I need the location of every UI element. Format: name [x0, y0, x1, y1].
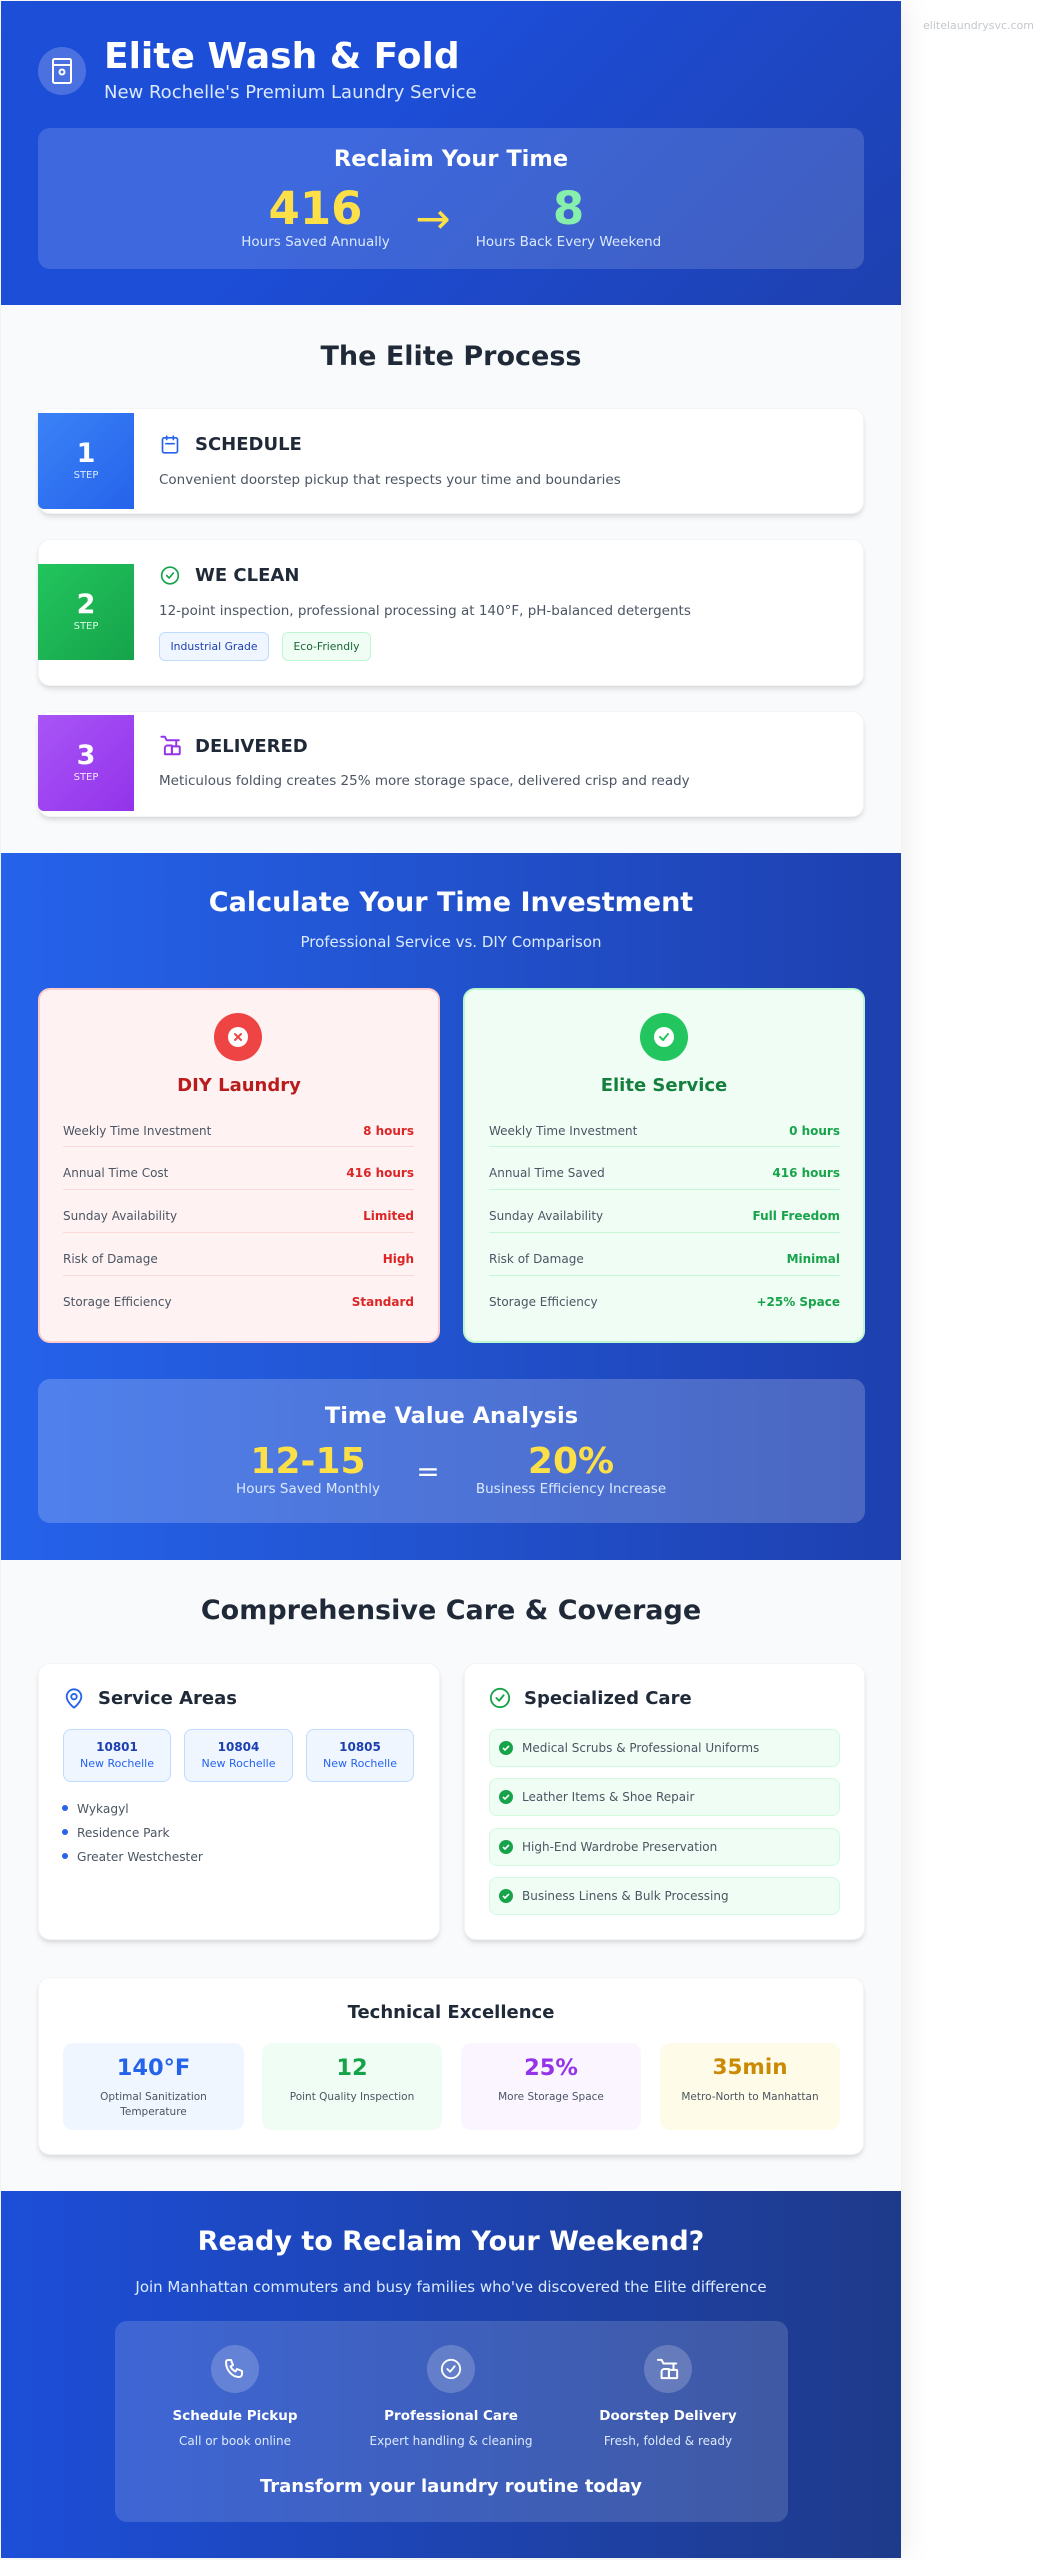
subtitle: New Rochelle's Premium Laundry Service [104, 82, 477, 103]
step 1 description: Convenient doorstep pickup that respects your time and boundaries [159, 472, 621, 488]
action: professional care: Professional Care [384, 2408, 518, 2424]
neighborhoods list: Wykagyl [77, 1802, 129, 1816]
panel: reclaim your time [38, 128, 864, 269]
specialized care title: Specialized Care [524, 1688, 692, 1709]
tile: 35min [660, 2043, 840, 2130]
heading: care: Comprehensive Care & Coverage [201, 1595, 701, 1626]
icon: washing machine [38, 47, 86, 95]
care item 4 [489, 1877, 840, 1915]
panel: header [1, 1, 901, 305]
step 3 description: Meticulous folding creates 25% more storage space, delivered crisp and ready [159, 773, 690, 789]
care item 2 [489, 1778, 840, 1816]
tile: 35min: 35min [712, 2055, 788, 2080]
step 2 number: 2 [77, 589, 95, 620]
DIY rows: 8 hours [363, 1124, 414, 1138]
action: doorstep delivery: Doorstep Delivery [599, 2408, 737, 2424]
icon: map pin [66, 1688, 82, 1709]
tile: 12: 12 [336, 2055, 368, 2081]
step 1 number: 1 [77, 438, 95, 469]
elite rows: 0 hours [789, 1124, 840, 1138]
zip 10801: New Rochelle [80, 1757, 154, 1770]
action: doorstep delivery [599, 2408, 737, 2448]
DIY title: DIY Laundry [177, 1075, 301, 1096]
icon: calendar [162, 435, 178, 454]
stat: 416 hours: 416 [269, 182, 362, 235]
tile: 140F: Optimal Sanitization [100, 2091, 207, 2103]
icon: check circle [427, 2345, 475, 2393]
step 3 card [38, 711, 864, 817]
step 1 card [38, 408, 864, 514]
DIY rows: Storage Efficiency [63, 1295, 172, 1309]
stat: 8 hours [476, 182, 661, 250]
DIY rows: High [383, 1252, 414, 1266]
step 3 title: DELIVERED [195, 736, 308, 757]
elite rows [489, 1124, 840, 1309]
elite rows: Sunday Availability [489, 1209, 603, 1223]
elite rows: Full Freedom [752, 1209, 840, 1223]
panel: specialized care [464, 1663, 865, 1940]
elite title: Elite Service [601, 1075, 727, 1096]
zip 10804 [184, 1729, 293, 1782]
tag: eco-friendly [282, 632, 371, 661]
stat: 8 hours: Hours Back Every Weekend [476, 234, 661, 250]
elite rows: +25% Space [756, 1295, 840, 1309]
stat: 20%: Business Efficiency Increase [476, 1481, 666, 1497]
panel: technical excellence [38, 1977, 864, 2155]
CTA subheading: Join Manhattan commuters and busy families who've discovered the Elite difference [135, 2278, 767, 2296]
zip 10801: 10801 [96, 1740, 138, 1754]
step 1 number: STEP [74, 470, 98, 481]
action: schedule pickup: Schedule Pickup [172, 2408, 298, 2424]
tile: 140F: Temperature [120, 2106, 187, 2118]
step 2 number: STEP [74, 621, 98, 632]
elite rows: Annual Time Saved [489, 1166, 605, 1180]
zip 10801 [63, 1729, 171, 1782]
service areas title: Service Areas [98, 1688, 237, 1709]
DIY rows: Risk of Damage [63, 1252, 158, 1266]
tile: 25%: 25% [524, 2055, 578, 2081]
stat: 12-15: 12-15 [250, 1441, 366, 1482]
care item 1 [489, 1729, 840, 1767]
tag: industrial grade [159, 632, 269, 661]
arrow: → [415, 194, 451, 243]
heading: calculator: Calculate Your Time Investment [209, 887, 693, 918]
tile: 12: Point Quality Inspection [290, 2091, 414, 2103]
action: professional care [369, 2408, 533, 2448]
tile: 25%: More Storage Space [498, 2091, 604, 2103]
elite rows: Risk of Damage [489, 1252, 584, 1266]
title: Elite Wash & Fold [104, 36, 460, 77]
care item 3: High-End Wardrobe Preservation [522, 1840, 717, 1854]
elite rows: Weekly Time Investment [489, 1124, 637, 1138]
panel: care and coverage [1, 1560, 901, 2191]
CTA closing line: Transform your laundry routine today [260, 2476, 642, 2497]
stat: 20%: 20% [528, 1441, 614, 1482]
action: doorstep delivery: Fresh, folded & ready [604, 2434, 732, 2448]
tile: 35min: Metro-North to Manhattan [681, 2091, 819, 2103]
action: schedule pickup: Call or book online [179, 2434, 291, 2448]
stat: 416 hours [241, 182, 390, 250]
step 2 description: 12-point inspection, professional processing at 140°F, pH-balanced detergents [159, 603, 691, 619]
stat: 416 hours: Hours Saved Annually [241, 234, 390, 250]
neighborhoods list: Greater Westchester [77, 1850, 203, 1864]
step 3 number: 3 [77, 740, 95, 771]
neighborhoods list [62, 1802, 203, 1864]
tile: 140F [63, 2043, 244, 2130]
action: schedule pickup [172, 2408, 298, 2448]
tag: eco-friendly: Eco-Friendly [293, 640, 360, 653]
panel: process [1, 305, 901, 853]
step 1 number [38, 413, 134, 509]
stat: 20% [476, 1441, 666, 1497]
step 2 card [38, 539, 864, 686]
CTA panel [115, 2321, 788, 2522]
panel: time value analysis [38, 1379, 865, 1523]
zip 10805: New Rochelle [323, 1757, 397, 1770]
DIY rows: 416 hours [346, 1166, 414, 1180]
DIY rows [63, 1124, 414, 1309]
step 2 number [38, 564, 134, 660]
tile: 25% [461, 2043, 641, 2130]
technical title: Technical Excellence [348, 2002, 554, 2023]
icon: delivery [644, 2345, 692, 2393]
tile: 12 [262, 2043, 442, 2130]
DIY rows: Annual Time Cost [63, 1166, 168, 1180]
elite rows: 416 hours [772, 1166, 840, 1180]
step 3 number [38, 715, 134, 811]
equals sign: = [416, 1455, 440, 1488]
DIY rows: Sunday Availability [63, 1209, 177, 1223]
heading: Reclaim Your Time [334, 146, 568, 172]
heading: process: The Elite Process [320, 341, 582, 372]
tag: industrial grade: Industrial Grade [170, 640, 258, 653]
icon: x circle [214, 1013, 262, 1061]
DIY rows: Limited [363, 1209, 414, 1223]
elite rows: Minimal [787, 1252, 840, 1266]
panel: elite service [463, 988, 865, 1343]
zip 10804: New Rochelle [201, 1757, 276, 1770]
tile: 140F: 140°F [117, 2055, 190, 2081]
panel: time calculator [1, 853, 901, 1560]
care item 1: Medical Scrubs & Professional Uniforms [522, 1741, 759, 1755]
care item 2: Leather Items & Shoe Repair [522, 1790, 694, 1804]
elite rows: Storage Efficiency [489, 1295, 598, 1309]
DIY rows: Weekly Time Investment [63, 1124, 211, 1138]
icon: phone [211, 2345, 259, 2393]
step 2 title: WE CLEAN [195, 565, 299, 586]
care item 3 [489, 1828, 840, 1866]
zip 10805: 10805 [339, 1740, 381, 1754]
zip 10805 [306, 1729, 414, 1782]
stat: 12-15: Hours Saved Monthly [236, 1481, 380, 1497]
icon: delivery [160, 736, 181, 756]
stat: 12-15 [236, 1441, 380, 1497]
neighborhoods list: Residence Park [77, 1826, 170, 1840]
DIY rows: Standard [352, 1295, 414, 1309]
domain label: elitelaundrysvc.com [923, 19, 1034, 32]
panel: DIY laundry [38, 988, 440, 1343]
action: professional care: Expert handling & cleaning [369, 2434, 533, 2448]
zip 10804: 10804 [218, 1740, 259, 1754]
CTA heading: Ready to Reclaim Your Weekend? [198, 2226, 704, 2257]
stat: 8 hours: 8 [553, 182, 584, 235]
heading: Time Value Analysis [325, 1403, 578, 1429]
icon: check badge [640, 1013, 688, 1061]
step 1 title: SCHEDULE [195, 434, 302, 455]
panel: service areas [38, 1663, 440, 1940]
panel: call to action [1, 2191, 901, 2558]
step 3 number: STEP [74, 772, 98, 783]
subheading: calculator: Professional Service vs. DIY Comparison [300, 933, 602, 951]
care item 4: Business Linens & Bulk Processing [522, 1889, 729, 1903]
icon: check circle [160, 566, 180, 585]
icon: check circle [490, 1688, 510, 1708]
